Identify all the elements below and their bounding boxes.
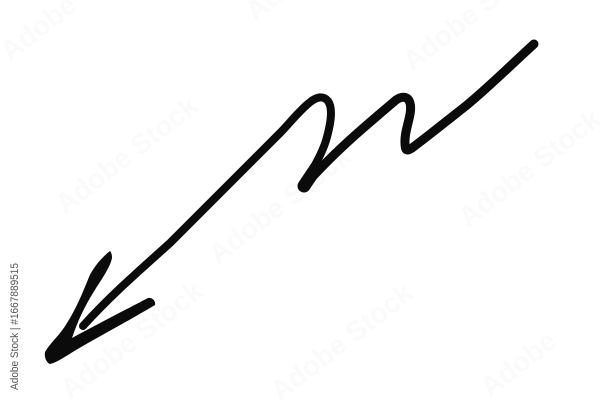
- thick base of zigzag: [304, 168, 316, 186]
- faint stock watermarks: Adobe: [475, 325, 562, 401]
- faint stock watermarks: Adobe Stock: [203, 140, 357, 270]
- faint stock watermarks: Adobe Stock: [55, 275, 209, 401]
- arrow shaft with zigzag: [83, 44, 534, 326]
- vertical stock credit: Adobe Stock | #1667889515: [9, 263, 21, 390]
- faint stock watermarks: Adobe Stock: [50, 90, 204, 220]
- arrow head: [45, 251, 155, 364]
